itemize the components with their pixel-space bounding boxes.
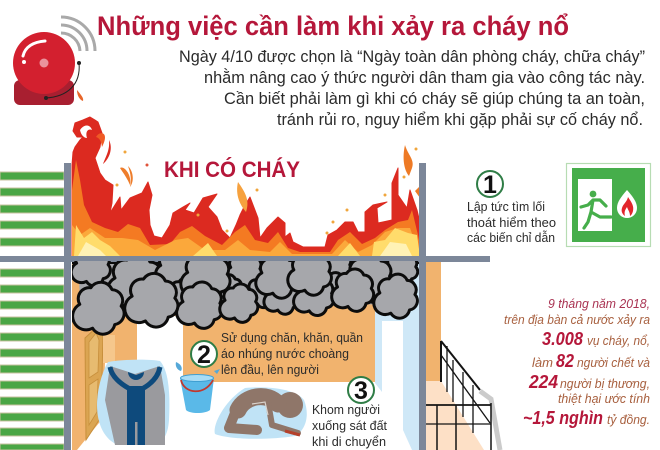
building windows: green stripes [0, 172, 64, 450]
statistics text: 82 [556, 351, 574, 371]
statistics text: trên địa bàn cả nước xảy ra [504, 312, 650, 327]
intro text: nhằm nâng cao ý thức người dân tham gia vào công tác này. [204, 68, 645, 87]
crawling person [215, 387, 307, 439]
intro text: tránh rủi ro, nguy hiểm khi gặp phải sự cố cháy nổ. [277, 110, 643, 129]
building frame [0, 163, 490, 450]
bell icon [13, 17, 95, 105]
step 1 text [467, 200, 556, 245]
step 1 text: các biến chỉ dẫn [467, 230, 555, 245]
intro text [179, 47, 645, 129]
step 3 badge [348, 377, 374, 405]
heading: when there is fire: KHI CÓ CHÁY [164, 157, 300, 182]
step 1 badge: 1 [483, 171, 497, 199]
exit sign [566, 164, 650, 246]
step 2 badge [191, 341, 217, 369]
statistics text: 3.008 [542, 329, 583, 349]
statistics text: làm [532, 355, 553, 370]
title: Những việc cần làm khi xảy ra cháy nổ [97, 11, 569, 41]
step 3 text [312, 402, 387, 449]
statistics text: ~1,5 nghìn [523, 408, 603, 428]
step 3 text: khi di chuyển [312, 434, 386, 449]
statistics text: người bị thương, [560, 376, 650, 391]
water bucket [176, 362, 220, 413]
statistics text: vụ cháy, nổ, [587, 333, 650, 348]
intro text: Cần biết phải làm gì khi có cháy sẽ giúp chúng ta an toàn, [224, 89, 645, 108]
staircase [426, 341, 500, 450]
statistics text: tỷ đồng. [607, 412, 650, 427]
step 1 text: Lập tức tìm lối [467, 200, 545, 214]
intro text: Ngày 4/10 được chọn là “Ngày toàn dân phòng cháy, chữa cháy” [179, 47, 645, 66]
statistics text: người chết và [577, 355, 650, 370]
step 2 text: áo nhúng nước choàng [221, 346, 349, 361]
statistics text: 224 [528, 372, 558, 392]
step 3 text: Khom người [312, 402, 380, 417]
statistics text: 9 tháng năm 2018, [548, 296, 650, 311]
statistics text: thiệt hại ước tính [558, 391, 650, 406]
statistics text [504, 296, 650, 428]
step 2 badge: 2 [197, 341, 211, 369]
smoke cloud [72, 261, 419, 336]
step 1 badge [477, 171, 503, 199]
step 2 text: Sử dụng chăn, khăn, quần [221, 330, 363, 345]
room walls [72, 261, 484, 450]
step 2 text [221, 330, 363, 377]
person with wet blanket [97, 360, 169, 445]
door [85, 327, 115, 440]
step 3 text: xuống sát đất [312, 418, 387, 433]
step 2 text: lên đầu, lên người [221, 362, 319, 377]
step 3 badge: 3 [354, 377, 368, 405]
step 1 text: thoát hiểm theo [467, 216, 556, 230]
flames [72, 117, 422, 256]
